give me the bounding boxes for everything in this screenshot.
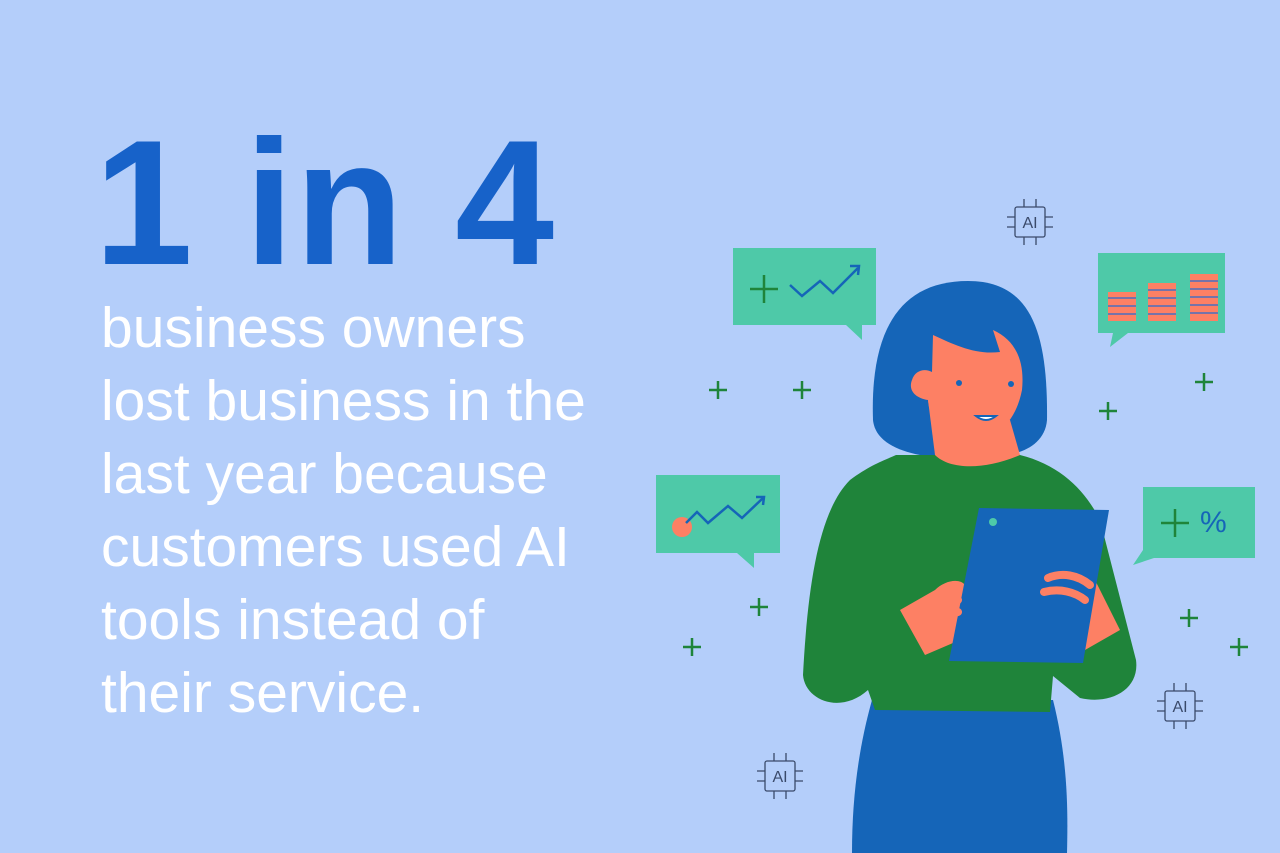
hands <box>900 581 965 655</box>
hair <box>873 281 1047 455</box>
AI chips <box>757 199 1203 799</box>
AI chips: AI <box>1022 215 1038 232</box>
skirt <box>852 700 1067 853</box>
body text <box>101 296 586 725</box>
woman figure <box>803 281 1136 853</box>
headline stat: 1 in 4 <box>94 103 555 302</box>
body text: business owners <box>101 296 526 360</box>
bubble: chart with dot <box>656 475 780 568</box>
body text: tools instead of <box>101 588 484 652</box>
AI chips: AI <box>772 769 788 786</box>
body text: last year because <box>101 442 548 506</box>
bubble: percent <box>1133 487 1255 565</box>
bubble: bar chart <box>1098 253 1225 347</box>
AI chips: AI <box>1172 699 1188 716</box>
plus signs <box>683 373 1248 656</box>
neck and face <box>928 400 1020 466</box>
bubble: growth chart <box>733 248 876 340</box>
body text: customers used AI <box>101 515 570 579</box>
body text: lost business in the <box>101 369 586 433</box>
bubble: percent: % <box>1200 506 1227 539</box>
body text: their service. <box>101 661 424 725</box>
shirt <box>803 455 1136 712</box>
tablet <box>949 508 1109 663</box>
